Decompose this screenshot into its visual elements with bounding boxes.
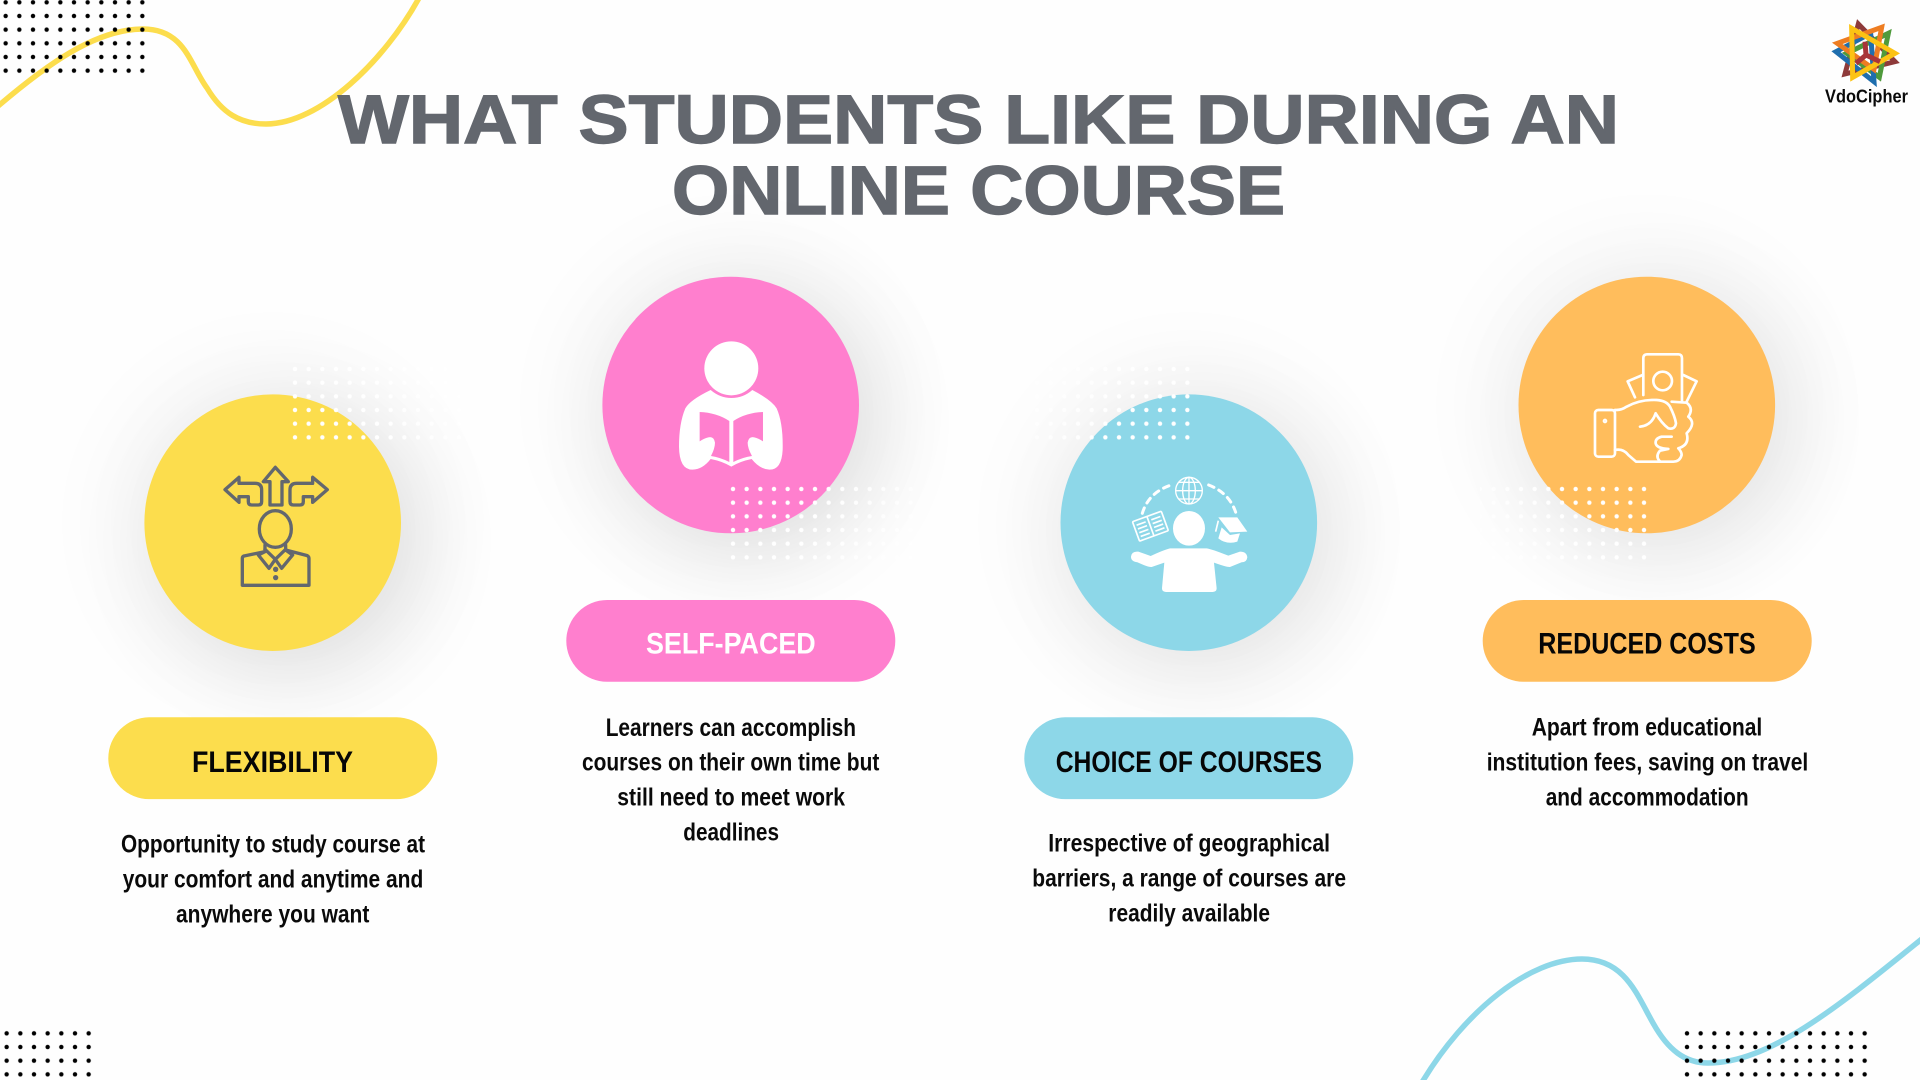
text: self-paced description: Learners can accomplish <box>606 715 856 742</box>
icon: person reading a book <box>679 341 783 470</box>
circle: self-paced <box>602 277 859 533</box>
icon: hand holding banknotes <box>1595 354 1697 462</box>
panel: choice of courses <box>1024 380 1354 926</box>
pill: choice of courses <box>1024 717 1353 799</box>
text: choice of courses description: readily available <box>1108 901 1270 928</box>
text: self-paced description: still need to meet work <box>617 785 845 812</box>
text: self-paced description <box>582 715 879 847</box>
pill: flexibility <box>108 717 437 799</box>
title: ONLINE COURSE <box>672 152 1285 229</box>
icon: person juggling globe, book and cap <box>1131 477 1247 592</box>
text: reduced costs description: institution fees, saving on travel <box>1487 750 1808 777</box>
circle: reduced costs <box>1518 277 1775 533</box>
panel: self-paced <box>566 258 906 840</box>
panel: flexibility <box>108 376 448 928</box>
text: self-paced description: courses on their own time but <box>582 750 879 777</box>
text: reduced costs description: and accommodation <box>1546 785 1749 812</box>
logo mark: interlocked triangles <box>1836 24 1895 82</box>
pill: self-paced: SELF-PACED <box>646 628 816 661</box>
text: flexibility description: Opportunity to study course at <box>121 831 425 858</box>
title <box>338 81 1619 229</box>
text: flexibility description: your comfort and anytime and <box>123 866 423 893</box>
circle: flexibility <box>144 394 401 651</box>
text: flexibility description: anywhere you want <box>176 901 369 928</box>
logo wordmark: VdoCipher <box>1825 86 1908 106</box>
pill: flexibility: FLEXIBILITY <box>192 746 353 779</box>
text: self-paced description: deadlines <box>683 820 779 847</box>
text: choice of courses description: Irrespective of geographical <box>1048 831 1330 858</box>
pill: self-paced <box>566 600 895 682</box>
pill: reduced costs: REDUCED COSTS <box>1538 628 1756 661</box>
title: WHAT STUDENTS LIKE DURING AN <box>338 81 1619 158</box>
logo: VdoCipher <box>1825 24 1908 106</box>
text: flexibility description <box>121 831 425 928</box>
text: reduced costs description <box>1487 715 1808 812</box>
text: reduced costs description: Apart from educational <box>1532 715 1762 742</box>
text: choice of courses description <box>1032 831 1346 928</box>
pill: reduced costs <box>1483 600 1812 682</box>
icon: person with three direction arrows <box>225 467 327 585</box>
circle: choice of courses <box>1060 394 1317 651</box>
text: choice of courses description: barriers, a range of courses are <box>1032 866 1346 893</box>
panel: reduced costs <box>1482 262 1814 806</box>
pill: choice of courses: CHOICE OF COURSES <box>1056 746 1322 779</box>
